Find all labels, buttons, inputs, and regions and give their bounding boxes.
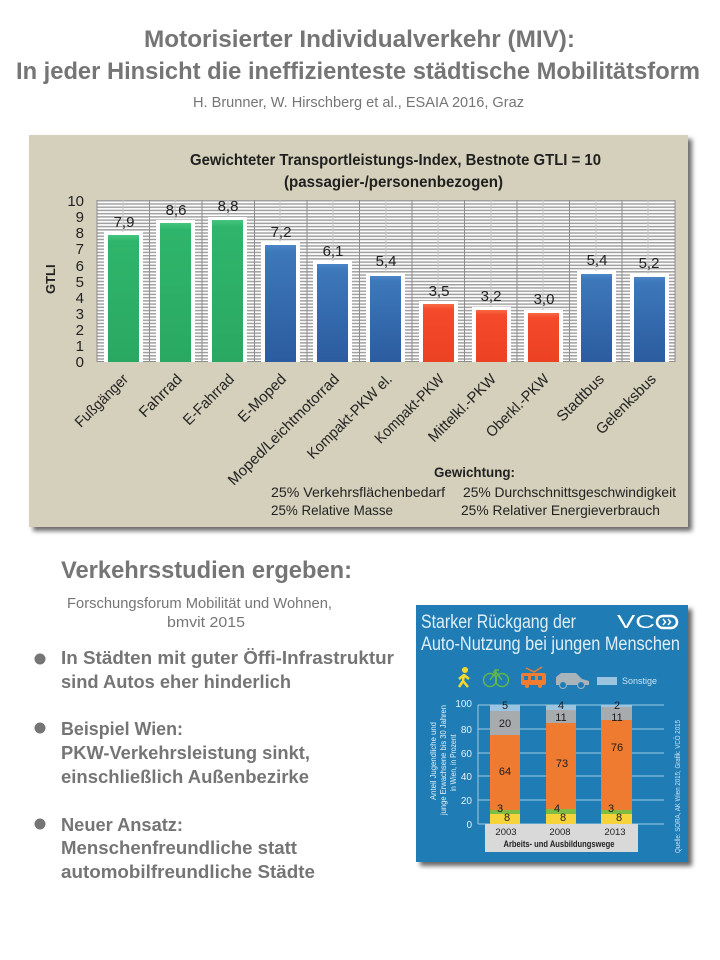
y axis labels: 10: [67, 193, 84, 210]
y axis labels and gridlines: 20: [461, 796, 472, 807]
category labels: Fahrrad: [136, 371, 186, 421]
x axis box: 2013: [604, 827, 626, 838]
category labels: Mittelkl.-PKW: [425, 370, 500, 446]
category labels: Stadtbus: [553, 371, 608, 425]
stacked bar values: 20: [499, 718, 511, 730]
heading: Verkehrsstudien: Verkehrsstudien ergeben:: [61, 557, 352, 584]
value labels: 3,5: [429, 283, 449, 300]
VCÖ logo: [617, 612, 677, 632]
y axis labels: 6: [76, 258, 84, 275]
category labels: [72, 370, 660, 489]
x axis box: Arbeits- und Ausbildungswege: [504, 839, 614, 849]
y axis title: in Wien, in Prozent: [448, 734, 458, 792]
y axis labels and gridlines: 0: [466, 820, 472, 831]
stacked bar values: 8: [616, 812, 622, 824]
source text: [67, 596, 332, 631]
category labels: Kompakt-PKW el.: [304, 371, 396, 463]
value labels: 5,4: [376, 253, 396, 270]
bullet list: [34, 648, 394, 882]
weighting legend: [271, 464, 676, 518]
weighting legend: Gewichtung:: [434, 464, 515, 480]
bar: Fußgänger: [108, 235, 139, 362]
bar: Moped/Leichtmotorrad: [317, 264, 348, 362]
y axis labels: 0: [76, 354, 84, 371]
x axis box: 2008: [549, 827, 571, 838]
y axis labels: [67, 193, 84, 371]
stacked bar values: 3: [608, 803, 614, 815]
bullet 1: sind Autos eher hinderlich: [61, 672, 291, 692]
stacked bar values: 76: [611, 742, 623, 754]
title: [16, 26, 700, 85]
chart title: (passagier-/personenbezogen): [284, 174, 503, 191]
VCÖ title: Starker Rückgang der: [421, 612, 577, 633]
value labels: 8,6: [166, 202, 186, 219]
category labels: E-Moped: [235, 371, 290, 426]
bar: Mittelkl.-PKW: [476, 310, 507, 362]
bullet 2: Beispiel Wien:: [61, 719, 183, 739]
y axis labels: 7: [76, 241, 84, 258]
bar: Gelenksbus: [634, 277, 665, 362]
stacked bar 2008: [546, 705, 576, 824]
source note: Quelle: SORA, AK Wien 2015; Grafik: VCÖ 2015: [673, 720, 682, 853]
value labels: 6,1: [323, 243, 343, 260]
value labels: 5,4: [587, 252, 607, 269]
bar: Stadtbus: [581, 274, 612, 362]
y axis labels and gridlines: 60: [461, 749, 472, 760]
chart title: [190, 152, 601, 191]
x axis box: 2003: [495, 827, 517, 838]
weighting legend: 25% Relativer Energieverbrauch: [461, 502, 660, 518]
y axis labels: 9: [76, 209, 84, 226]
weighting legend: 25% Verkehrsflächenbedarf: [271, 484, 445, 500]
y axis labels and gridlines: 80: [461, 725, 472, 736]
category labels: Gelenksbus: [593, 371, 660, 438]
bar: Fahrrad: [160, 223, 191, 362]
category labels: E-Fahrrad: [180, 371, 238, 429]
category labels: Moped/Leichtmotorrad: [225, 371, 343, 489]
bullet 1: In Städten mit guter Öffi-Infrastruktur: [61, 648, 394, 668]
value labels: 3,2: [481, 288, 501, 305]
x axis box: [485, 824, 638, 852]
value labels: [114, 198, 659, 308]
source text: bmvit 2015: [167, 615, 245, 631]
icon: car: [556, 673, 589, 688]
y axis labels: 4: [76, 290, 84, 307]
stacked bar 2003: [490, 705, 520, 824]
value labels: 7,9: [114, 214, 134, 231]
icon: bicycle: [484, 670, 508, 686]
stacked bar values: 11: [555, 712, 567, 724]
stacked bar values: 4: [558, 700, 564, 712]
stacked bar values: 8: [504, 812, 510, 824]
stacked bar values: 8: [560, 812, 566, 824]
plot grid: [97, 200, 675, 362]
weighting legend: 25% Relative Masse: [271, 502, 393, 518]
y axis labels and gridlines: 100: [455, 699, 472, 710]
icon: pedestrian: [459, 668, 469, 687]
value labels: 3,0: [534, 291, 554, 308]
bullet 3: automobilfreundliche Städte: [61, 862, 315, 882]
category labels: Kompakt-PKW: [371, 370, 448, 447]
bar: E-Moped: [265, 245, 296, 362]
stacked bar values: 5: [502, 700, 508, 712]
subtitle: source: H. Brunner, W. Hirschberg et al., ESAIA 2016, Graz: [193, 94, 524, 111]
bar: Kompakt-PKW el.: [370, 276, 401, 362]
stacked bar values: 73: [556, 758, 568, 770]
title: In jeder Hinsicht die ineffizienteste städtische Mobilitätsform: [16, 58, 700, 85]
stacked bar values: 2: [614, 700, 620, 712]
bullet 2: [34, 719, 310, 787]
y axis title: GTLI: [43, 264, 58, 294]
y axis labels: 8: [76, 225, 84, 242]
legend: Sonstige: [597, 676, 657, 686]
y axis labels: 5: [76, 274, 84, 291]
y axis labels: 1: [76, 338, 84, 355]
bar: Oberkl.-PKW: [528, 313, 559, 362]
legend: Sonstige: Sonstige: [622, 676, 657, 686]
bullet 1: [34, 648, 394, 692]
y axis title: Anteil Jugendliche und: [428, 722, 438, 800]
stacked bar 2013: [601, 705, 632, 824]
stacked bar values: 4: [554, 803, 560, 815]
y axis labels: 3: [76, 306, 84, 323]
stacked bar values: [497, 700, 623, 824]
VCÖ logo: VC: [617, 612, 655, 632]
stacked bar values: 11: [611, 712, 623, 724]
value labels: 8,8: [218, 198, 238, 215]
icon: tram: [521, 667, 546, 688]
bullet 2: PKW-Verkehrsleistung sinkt,: [61, 743, 310, 763]
title: Motorisierter Individualverkehr (MIV):: [144, 26, 575, 53]
value labels: 5,2: [639, 255, 659, 272]
bullet 3: Neuer Ansatz:: [61, 815, 183, 835]
bullet 3: [34, 815, 315, 882]
panel: VCÖ chart: [416, 605, 692, 866]
bars: [104, 217, 669, 362]
stacked bar values: 3: [497, 803, 503, 815]
y axis labels and gridlines: [455, 699, 664, 831]
value labels: 7,2: [271, 224, 291, 241]
panel: GTLI chart: [29, 135, 692, 531]
y axis title: [428, 705, 458, 816]
bar: Kompakt-PKW: [423, 304, 454, 362]
VCÖ title: Auto-Nutzung bei jungen Menschen: [421, 634, 680, 655]
weighting legend: 25% Durchschnittsgeschwindigkeit: [463, 484, 676, 500]
category labels: Oberkl.-PKW: [483, 370, 553, 441]
category labels: Fußgänger: [72, 371, 132, 431]
bullet 3: Menschenfreundliche statt: [61, 838, 297, 858]
y axis labels and gridlines: 40: [461, 772, 472, 783]
chart title: Gewichteter Transportleistungs-Index, Bestnote GTLI = 10: [190, 152, 601, 169]
bullet 2: einschließlich Außenbezirke: [61, 767, 309, 787]
source text: Forschungsforum Mobilität und Wohnen,: [67, 596, 332, 612]
stacked bar values: 64: [499, 766, 511, 778]
bar: E-Fahrrad: [212, 220, 243, 362]
VCÖ title: [421, 612, 680, 655]
y axis labels: 2: [76, 322, 84, 339]
y axis title: junge Erwachsene bis 30 Jahren: [438, 705, 448, 816]
